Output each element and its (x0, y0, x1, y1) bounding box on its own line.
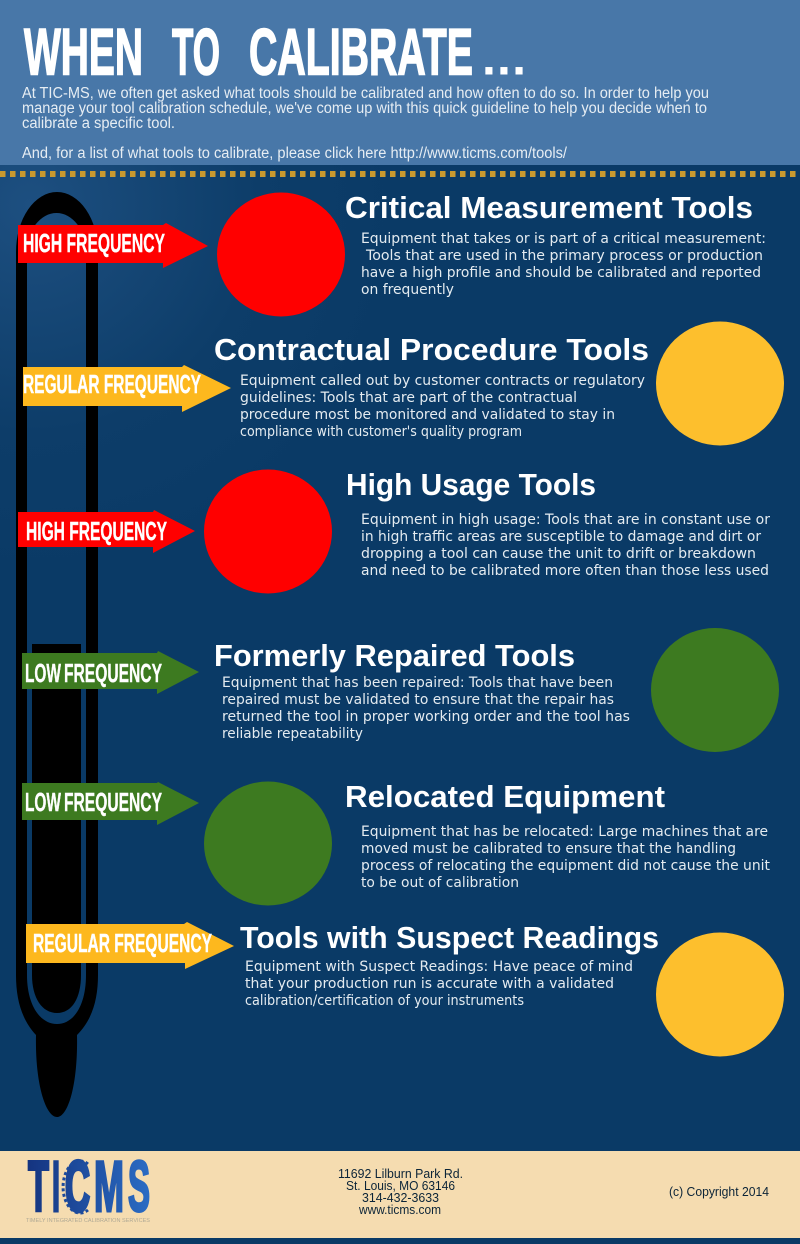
section: relocated equipment: Relocated Equipment (345, 779, 665, 814)
circle: high 2 (204, 470, 332, 594)
section: formerly repaired tools: returned the tool in proper working order and the tool has (222, 709, 630, 725)
section: relocated equipment: moved must be calibrated to ensure that the handling (361, 841, 736, 857)
logo: TICMS: TIMELY INTEGRATED CALIBRATION SERVICES (26, 1218, 151, 1224)
section: tools with suspect readings: that your production run is accurate with a validated (245, 976, 614, 992)
title: CALIBRATE (249, 14, 473, 88)
logo: TICMS (26, 1148, 151, 1227)
section: tools with suspect readings: Tools with Suspect Readings (240, 920, 659, 955)
section: high usage tools: Equipment in high usage: Tools that are in constant use or (361, 512, 770, 528)
arrow: low frequency 1: LOW (25, 658, 61, 688)
title: WHEN (24, 14, 143, 88)
arrow: regular frequency 2: REGULAR FREQUENCY (33, 928, 212, 958)
section: critical measurement tools: Critical Measurement Tools (345, 190, 753, 225)
circle: regular 2 (656, 932, 784, 1056)
arrow: regular frequency 1: REGULAR FREQUENCY (23, 369, 201, 399)
section: contractual procedure tools: guidelines: Tools that are part of the contractual (240, 390, 577, 406)
arrow: low frequency 1 (22, 651, 199, 694)
intro text: calibrate a specific tool. (22, 115, 175, 132)
section: contractual procedure tools: compliance with customer's quality program (240, 424, 522, 440)
address (338, 1166, 463, 1217)
section: tools with suspect readings: Equipment with Suspect Readings: Have peace of mind (245, 959, 633, 975)
section: critical measurement tools: on frequently (361, 282, 454, 298)
arrow: regular frequency 2 (26, 922, 234, 969)
arrow: low frequency 1: FREQUENCY (64, 658, 162, 688)
arrow: high frequency 2: HIGH FREQUENCY (26, 516, 167, 546)
address: 314-432-3633 (362, 1190, 439, 1205)
section: critical measurement tools (345, 190, 766, 298)
section: relocated equipment: Equipment that has be relocated: Large machines that are (361, 824, 768, 840)
title: TO (172, 14, 220, 88)
section: high usage tools: High Usage Tools (346, 467, 596, 502)
circle: regular 1 (656, 322, 784, 446)
section: relocated equipment (345, 779, 770, 891)
intro text: manage your tool calibration schedule, we've come up with this quick guideline to help you decide when to (22, 100, 707, 117)
section: tools with suspect readings: calibration/certification of your instruments (245, 993, 524, 1009)
header band (0, 0, 800, 165)
intro text: At TIC-MS, we often get asked what tools should be calibrated and how often to do so. In order to help you (22, 85, 709, 102)
arrow: low frequency 2 (22, 782, 199, 825)
intro text (22, 85, 709, 162)
section: formerly repaired tools (214, 638, 630, 742)
section: contractual procedure tools: Equipment called out by customer contracts or regulatory (240, 373, 645, 389)
section: high usage tools: in high traffic areas are susceptible to damage and dirt or (361, 529, 761, 545)
section: formerly repaired tools: Formerly Repaired Tools (214, 638, 575, 673)
logo: TICMS: C (65, 1148, 90, 1227)
intro text: And, for a list of what tools to calibrate, please click here http://www.ticms.com/tools/ (22, 145, 568, 162)
icon: tuning fork (16, 192, 98, 1117)
section: relocated equipment: process of relocating the equipment did not cause the unit (361, 858, 770, 874)
arrow: high frequency 1 (18, 223, 208, 268)
logo: TICMS: M (94, 1148, 124, 1227)
title (24, 14, 526, 88)
section: contractual procedure tools (214, 332, 649, 440)
address: 11692 Lilburn Park Rd. (338, 1166, 463, 1181)
section: critical measurement tools: Equipment that takes or is part of a critical measurement: (361, 231, 766, 247)
arrow: high frequency 2 (18, 510, 195, 553)
section: relocated equipment: to be out of calibration (361, 875, 519, 891)
arrow: regular frequency 1 (23, 365, 231, 412)
section: formerly repaired tools: reliable repeatability (222, 726, 363, 742)
section: high usage tools (346, 467, 770, 579)
address: St. Louis, MO 63146 (346, 1178, 455, 1193)
circle: low 2 (204, 782, 332, 906)
circle: high 1 (217, 192, 345, 316)
section: critical measurement tools: have a high profile and should be calibrated and reported (361, 265, 761, 281)
footer band: S (128, 1148, 150, 1227)
arrow: low frequency 2: FREQUENCY (64, 787, 162, 817)
title: ... (482, 30, 526, 86)
section: contractual procedure tools: procedure most be monitored and validated to stay in (240, 407, 615, 423)
section: high usage tools: dropping a tool can cause the unit to drift or breakdown (361, 546, 756, 562)
circle: low 1 (651, 628, 779, 752)
section: tools with suspect readings (240, 920, 659, 1009)
logo: TICMS: I (52, 1148, 60, 1227)
section: formerly repaired tools: Equipment that has been repaired: Tools that have been (222, 675, 613, 691)
dotted divider (0, 171, 800, 177)
footer band (0, 1148, 800, 1238)
arrow: high frequency 1: HIGH FREQUENCY (23, 228, 165, 258)
section: contractual procedure tools: Contractual Procedure Tools (214, 332, 649, 367)
section: critical measurement tools: Tools that are used in the primary process or production (365, 248, 763, 264)
address: www.ticms.com (358, 1202, 441, 1217)
section: high usage tools: and need to be calibrated more often than those less used (361, 563, 769, 579)
arrow: low frequency 2: LOW (25, 787, 61, 817)
logo: TICMS: T (28, 1148, 49, 1227)
copyright: (c) Copyright 2014 (669, 1184, 769, 1199)
section: formerly repaired tools: repaired must be validated to ensure that the repair has (222, 692, 614, 708)
